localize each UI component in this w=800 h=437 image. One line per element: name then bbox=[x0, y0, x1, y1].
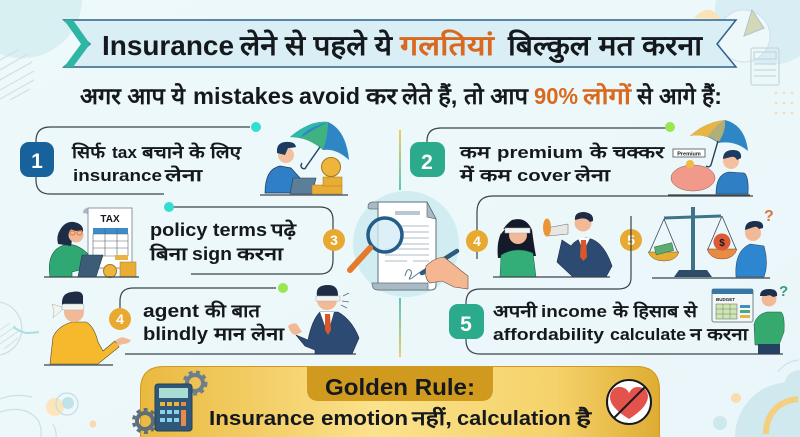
title text: गलतियां bbox=[399, 29, 496, 61]
icon: background pie chart bbox=[718, 10, 770, 62]
icon: balance scale and man: ? bbox=[764, 208, 774, 225]
panel 4 text: blindly bbox=[143, 324, 208, 344]
central icon: contract, magnifier and pen bbox=[350, 191, 468, 297]
panel 1 text: tax bbox=[112, 143, 138, 162]
icon: woman blindfolded and man with megaphone bbox=[493, 212, 612, 277]
panel 2 text: कम bbox=[459, 143, 491, 162]
badge 5 bbox=[449, 304, 484, 339]
icon: balance scale and man bbox=[648, 207, 774, 278]
badge 2 bbox=[410, 142, 445, 177]
badge 5: 5 bbox=[460, 313, 472, 336]
golden rule text: नहीं, bbox=[411, 406, 452, 430]
panel 3 text: policy terms bbox=[150, 220, 267, 240]
icon: budget sheet and man: ? bbox=[779, 283, 788, 300]
panel 2 text: के चक्कर bbox=[589, 142, 665, 162]
icon: blindfolded person in yellow bbox=[44, 292, 131, 365]
badge 4 right bbox=[466, 230, 488, 252]
panel 1: tax bbox=[20, 122, 349, 195]
panel 2 text: लेना bbox=[574, 165, 611, 185]
badge 4 right: 4 bbox=[473, 233, 481, 249]
panel 4 text: की बात bbox=[204, 300, 261, 321]
golden rule text: है bbox=[575, 406, 593, 430]
badge 5 middle bbox=[620, 229, 642, 251]
icon: man with umbrella and coins bbox=[260, 122, 349, 195]
subtitle: लेते हैं, तो आप bbox=[401, 82, 529, 109]
title text: बिल्कुल मत करना bbox=[507, 29, 704, 63]
title banner bbox=[64, 20, 736, 67]
panel 3: policy terms bbox=[44, 202, 345, 278]
panel 5 text: affordability bbox=[493, 325, 605, 344]
golden rule text: Insurance emotion bbox=[209, 408, 408, 430]
icon: woman with tax form: TAX bbox=[100, 214, 120, 225]
icon: calculator with gears bbox=[134, 372, 206, 432]
badge 3 bbox=[323, 229, 345, 251]
golden rule text: calculation bbox=[457, 408, 571, 430]
icon: blindfolded agent bbox=[288, 285, 359, 354]
subtitle: avoid bbox=[299, 83, 360, 109]
panel 4 right: misleading agent bbox=[466, 196, 774, 278]
panel 5 text: अपनी bbox=[493, 301, 538, 321]
panel 2: low premium bbox=[410, 120, 750, 195]
subtitle: से आगे हैं: bbox=[636, 82, 722, 109]
badge 5 middle: 5 bbox=[627, 232, 635, 248]
icon: crossed-out heart bbox=[607, 380, 651, 424]
panel 1 text: insurance bbox=[73, 166, 162, 185]
panel 2 text: premium bbox=[497, 143, 583, 162]
badge 4 bbox=[109, 308, 131, 330]
panel 5 text: न करना bbox=[689, 325, 749, 344]
badge 1 bbox=[20, 142, 54, 177]
icon: piggy bank, umbrella and man: Premium bbox=[677, 152, 701, 158]
golden rule label bbox=[307, 367, 493, 401]
subtitle: कर bbox=[365, 83, 399, 109]
icon: background calculator bbox=[751, 48, 779, 85]
panel 1 text: लेना bbox=[164, 165, 203, 185]
icon: piggy bank, umbrella and man bbox=[668, 120, 750, 195]
panel 5 text: income bbox=[541, 302, 607, 321]
badge 3: 3 bbox=[330, 232, 338, 248]
title text: लेने से पहले ये bbox=[239, 29, 394, 61]
panel 2 text: cover bbox=[517, 166, 571, 185]
badge 4: 4 bbox=[116, 311, 124, 327]
golden rule banner bbox=[134, 366, 660, 437]
panel 1 text: सिर्फ bbox=[71, 142, 106, 162]
icon: budget sheet and man bbox=[712, 283, 788, 354]
panel 4 text: agent bbox=[143, 301, 199, 321]
golden rule label: Golden Rule: bbox=[325, 374, 475, 400]
badge 2: 2 bbox=[421, 151, 433, 174]
panel 3 text: करना bbox=[236, 244, 285, 264]
icon: balance scale and man: $ bbox=[719, 238, 725, 249]
icon: woman with tax form bbox=[44, 208, 139, 278]
panel 5: affordability bbox=[449, 216, 788, 354]
badge 1: 1 bbox=[31, 150, 43, 173]
panel 4 text: मान लेना bbox=[213, 323, 286, 344]
subtitle: 90% bbox=[534, 83, 578, 109]
panel 3 text: बिना bbox=[149, 243, 189, 264]
hatch circle top-left bbox=[0, 50, 34, 100]
panel 5 text: के हिसाब से bbox=[612, 301, 699, 321]
subtitle: mistakes bbox=[193, 83, 294, 109]
subtitle: अगर आप ये bbox=[80, 82, 187, 109]
subtitle: लोगों bbox=[582, 82, 632, 109]
title text: Insurance bbox=[102, 30, 234, 61]
vertical divider bbox=[399, 130, 401, 357]
panel 2 text: में कम bbox=[459, 165, 512, 185]
panel 1 text: बचाने के लिए bbox=[141, 142, 242, 162]
panel 3 text: पढ़े bbox=[270, 219, 297, 240]
icon: budget sheet and man: BUDGET bbox=[716, 297, 735, 302]
panel 4 left: agent bbox=[44, 283, 359, 365]
panel 5 text: calculate bbox=[610, 325, 686, 344]
panel 3 text: sign bbox=[192, 244, 232, 264]
